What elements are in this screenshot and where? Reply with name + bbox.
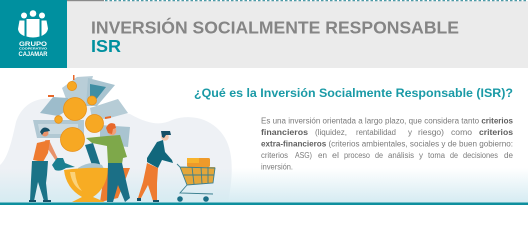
banknote leaves — [33, 76, 130, 147]
text block: definition — [261, 116, 514, 172]
title: ISR — [91, 36, 122, 56]
text block: definition: inversión. — [261, 162, 293, 172]
text block: definition: y — [419, 151, 423, 160]
text block: definition: (liquidez, — [315, 128, 347, 137]
text block: definition: decisiones — [463, 151, 498, 160]
text block: definition: extra-financieros (criterios ambientales, sociales y de buen gobierno: — [261, 140, 513, 148]
shopping cart — [177, 158, 215, 202]
small sparks — [48, 75, 111, 119]
text block: definition: criterios — [261, 151, 288, 160]
text block: definition: Es una inversión orientada a largo plazo, que considera tanto criterios — [261, 116, 514, 126]
text block: definition: como — [451, 128, 473, 137]
tree trunk — [85, 143, 101, 168]
title — [91, 18, 459, 56]
text block: definition: proceso — [344, 151, 370, 160]
icon: group of people — [18, 10, 48, 37]
text block: definition: de — [375, 151, 383, 160]
man with cart — [137, 131, 173, 202]
logo text — [18, 41, 48, 58]
background blob — [0, 99, 232, 203]
text block: definition: ASG) — [295, 151, 312, 160]
text block: definition: análisis — [388, 151, 414, 160]
woman watering — [29, 128, 75, 202]
text block: definition: toma — [428, 151, 446, 160]
bottom teal bar — [0, 202, 528, 205]
text block: definition: criterios — [479, 128, 514, 137]
text block: definition: de — [450, 151, 458, 160]
gold pot — [100, 168, 130, 202]
watering can — [52, 158, 75, 171]
text block: definition: el — [332, 151, 339, 160]
illustration: money tree and people — [29, 75, 215, 202]
text block: definition: y — [408, 128, 412, 137]
bottom background gradient — [0, 168, 528, 203]
gold coins — [55, 81, 104, 152]
text block: definition: riesgo) — [418, 128, 444, 137]
header band — [67, 1, 528, 68]
man in green — [86, 123, 130, 202]
heading: question: ¿Qué es la Inversión Socialmente Responsable (ISR)? — [194, 86, 513, 100]
logo text: COOPERATIVO — [19, 47, 48, 51]
logo panel — [0, 0, 67, 68]
text block: definition: de — [504, 151, 514, 160]
title: INVERSIÓN SOCIALMENTE RESPONSABLE — [91, 18, 459, 38]
text block: definition: rentabilidad — [356, 128, 396, 137]
text block: definition: financieros — [261, 128, 309, 137]
text block: definition: en — [318, 151, 327, 160]
logo text: GRUPO — [19, 41, 47, 48]
top dashed strip — [67, 0, 528, 1]
logo text: CAJAMAR — [18, 51, 48, 58]
